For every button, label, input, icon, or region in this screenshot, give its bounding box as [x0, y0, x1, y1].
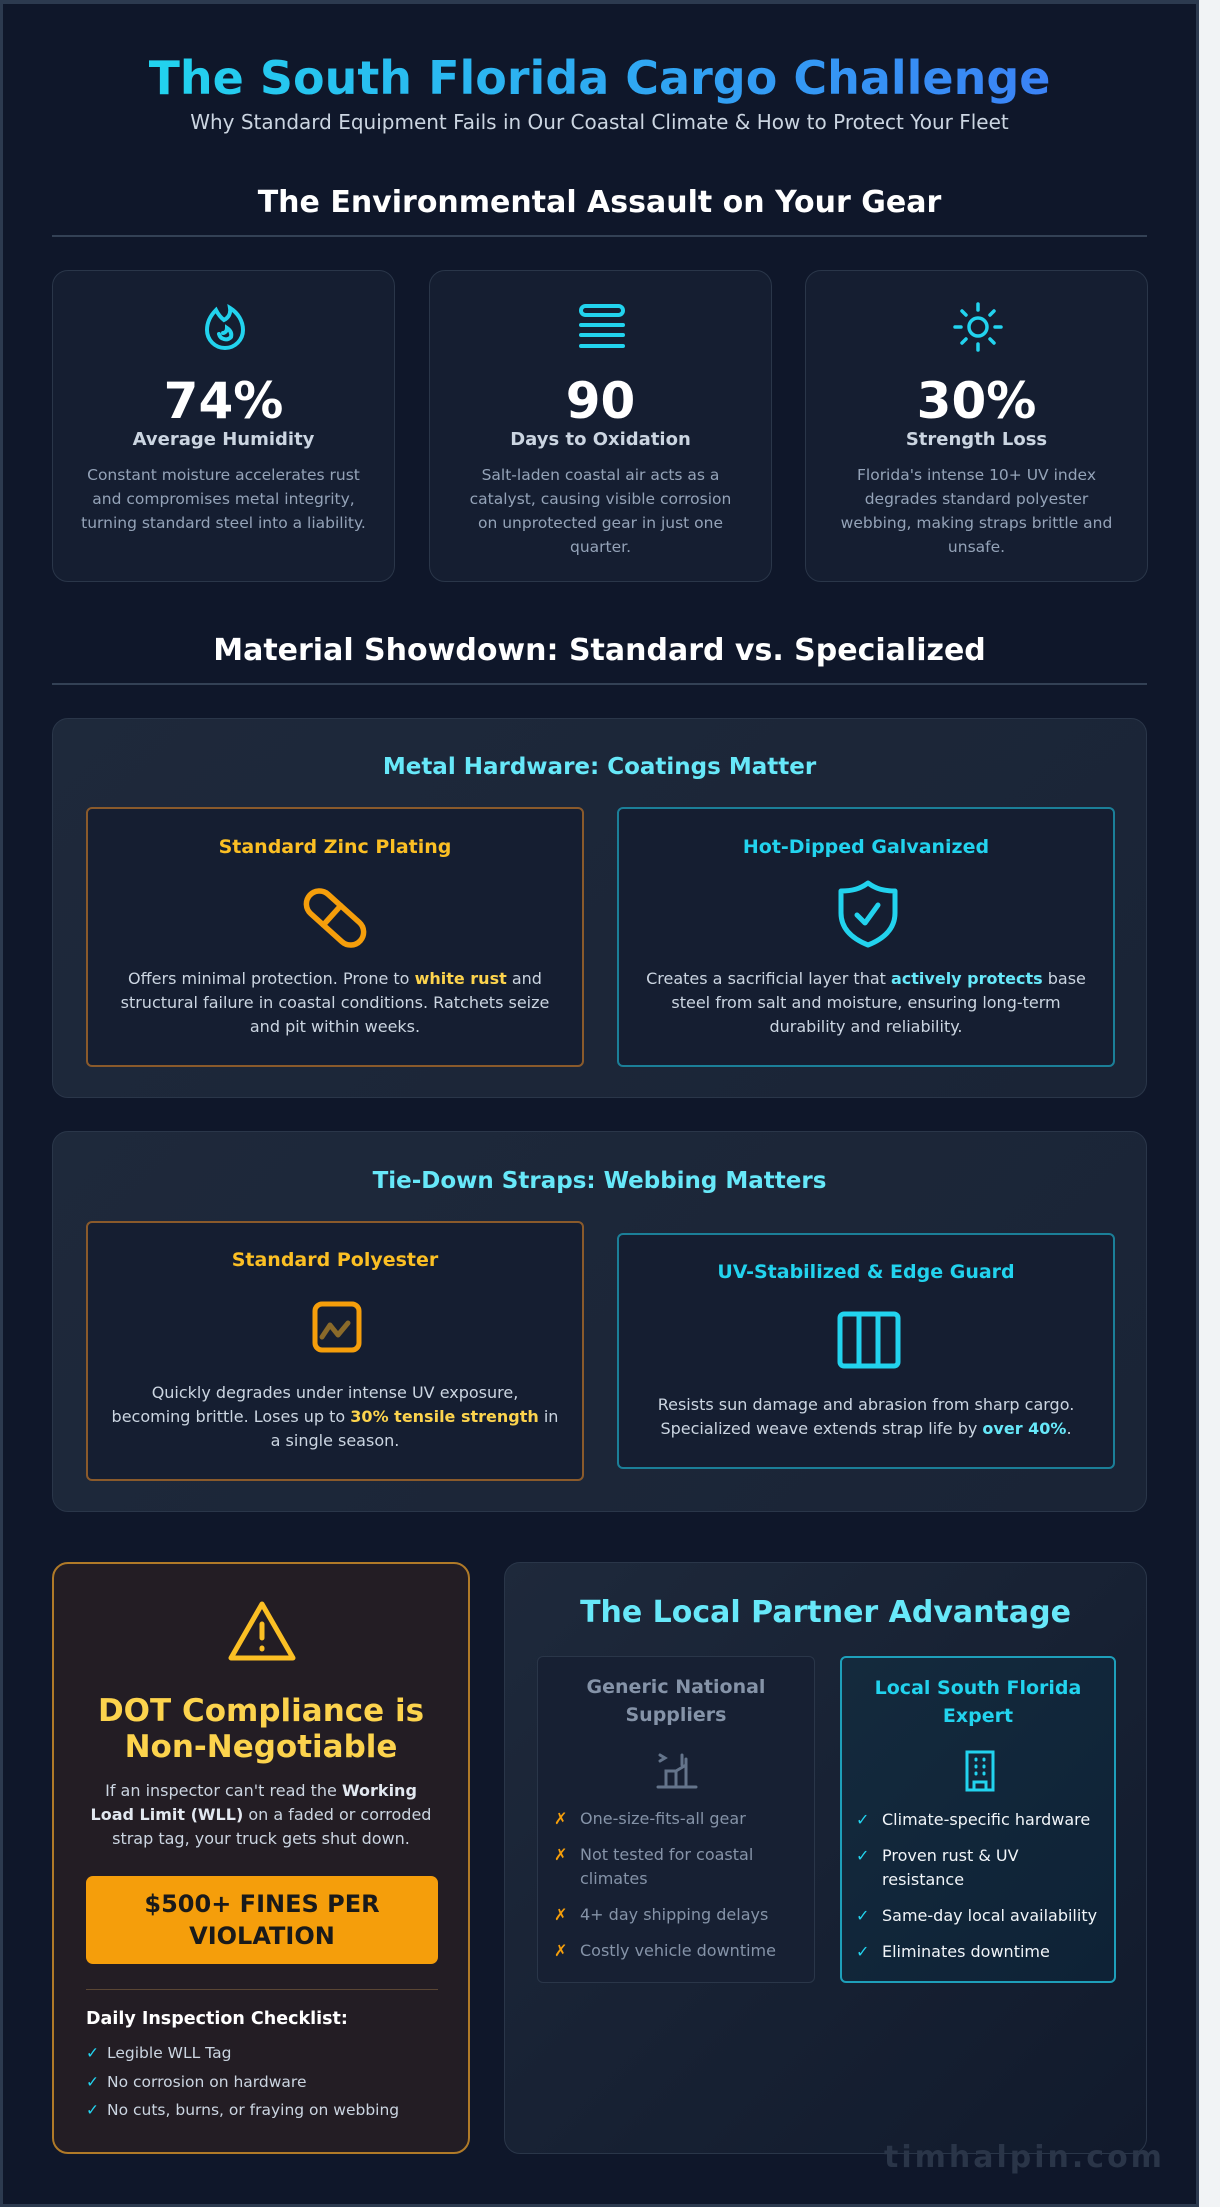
- subtitle: Why Standard Equipment Fails in Our Coastal Climate & How to Protect Your Fleet: [190, 110, 1009, 134]
- card: generic national: ✗: [554, 1905, 567, 1924]
- card: hot-dipped galvanized: [617, 807, 1115, 1067]
- stat card: humidity: Average Humidity: [133, 429, 314, 450]
- card: local expert: ✓: [856, 1906, 869, 1925]
- icon: factory: [656, 1753, 698, 1788]
- text: If an inspector can't read the Working Load Limit (WLL) on a faded or corroded strap tag, your truck gets shut down.: [91, 1781, 431, 1848]
- card: local expert: ✓: [856, 1846, 869, 1865]
- stat card: humidity: 74%: [164, 372, 283, 430]
- card: UV-stabilized: UV-Stabilized & Edge Guard: [717, 1261, 1015, 1283]
- card: local expert: ✓: [856, 1942, 869, 1961]
- card: generic national: Generic National: [587, 1676, 765, 1698]
- fine callout: $500+ FINES PER: [144, 1890, 380, 1918]
- watermark: timhalpin.com: [884, 2140, 1165, 2175]
- stat card: strength loss: Strength Loss: [906, 429, 1047, 450]
- card: zinc plating: [86, 807, 584, 1067]
- title: The South Florida Cargo Challenge: [148, 51, 1050, 105]
- panel: local partner advantage: [504, 1562, 1147, 2154]
- fine callout: VIOLATION: [189, 1922, 335, 1950]
- panel title: Tie-Down Straps: Webbing Matters: [373, 1168, 826, 1194]
- heading: DOT Compliance is: [98, 1693, 424, 1729]
- card: hot-dipped galvanized: Hot-Dipped Galvanized: [743, 836, 989, 858]
- heading: environmental assault: The Environmental Assault on Your Gear: [258, 185, 941, 220]
- heading: [98, 1693, 424, 1765]
- card: standard polyester: Standard Polyester: [232, 1249, 438, 1271]
- stat card: oxidation: [429, 270, 772, 582]
- checklist: ✓: [86, 2072, 99, 2090]
- checklist: No corrosion on hardware: [107, 2072, 306, 2090]
- card: generic national: Suppliers: [625, 1704, 726, 1726]
- card: standard polyester: a single season.: [271, 1431, 399, 1450]
- card: local expert: Expert: [943, 1705, 1013, 1727]
- icon: sun: [953, 302, 1003, 352]
- heading: material showdown: Material Showdown: Standard vs. Specialized: [213, 633, 986, 668]
- card: standard polyester: [86, 1221, 584, 1481]
- icon: pill: [304, 888, 366, 948]
- card: local expert: Same-day local availability: [882, 1906, 1097, 1925]
- card: local expert: Climate-specific hardware: [882, 1810, 1090, 1829]
- card: generic national: ✗: [554, 1845, 567, 1864]
- card: generic national: 4+ day shipping delays: [580, 1905, 768, 1924]
- card: generic national: One-size-fits-all gear: [580, 1809, 746, 1828]
- checklist: [86, 2009, 399, 2119]
- fine callout: [86, 1876, 438, 1964]
- card: local expert: Local South Florida: [875, 1677, 1081, 1699]
- stat card: oxidation: Salt-laden coastal air acts as a catalyst, causing visible corrosion on unprotected gear in just one quarter.: [470, 466, 731, 556]
- icon: columns: [838, 1312, 900, 1368]
- card: local expert: Proven rust & UV resistance: [882, 1846, 1019, 1889]
- card: standard polyester: Quickly degrades under intense UV exposure,: [152, 1383, 518, 1402]
- checklist: ✓: [86, 2044, 99, 2062]
- card: zinc plating: Standard Zinc Plating: [219, 836, 451, 858]
- card: UV-stabilized: Resists sun damage and abrasion from sharp cargo. Specialized weave extends strap life by over 40%.: [658, 1395, 1074, 1438]
- checklist: ✓: [86, 2101, 99, 2119]
- icon: shield check: [838, 880, 898, 948]
- stat card: oxidation: 90: [566, 372, 635, 430]
- card: generic national: ✗: [554, 1809, 567, 1828]
- heading: Non-Negotiable: [125, 1729, 397, 1765]
- icon: flame/drop: [205, 304, 245, 350]
- card: generic national: Not tested for coastal climates: [580, 1845, 753, 1888]
- card: local expert: [840, 1656, 1116, 1983]
- card: generic national: ✗: [554, 1941, 567, 1960]
- stat card: strength loss: 30%: [917, 372, 1036, 430]
- card: UV-stabilized: [617, 1233, 1115, 1469]
- card: generic national: Costly vehicle downtime: [580, 1941, 776, 1960]
- checklist: No cuts, burns, or fraying on webbing: [107, 2101, 399, 2119]
- card: local expert: Eliminates downtime: [882, 1942, 1050, 1961]
- panel: tie-down straps: [52, 1131, 1147, 1512]
- stat card: strength loss: Florida's intense 10+ UV index degrades standard polyester webbing, making straps brittle and unsafe.: [841, 466, 1112, 556]
- icon: layers: [579, 304, 625, 348]
- stat card: oxidation: Days to Oxidation: [510, 429, 691, 450]
- stat card: strength loss: [805, 270, 1148, 582]
- card: zinc plating: Offers minimal protection. Prone to white rust and structural failure in coastal conditions. Ratchets seize and pit within weeks.: [121, 969, 549, 1036]
- panel title: The Local Partner Advantage: [580, 1595, 1071, 1630]
- icon: square chart: [312, 1302, 362, 1352]
- icon: warning: [228, 1602, 296, 1660]
- panel: DOT compliance: [52, 1562, 470, 2154]
- card: generic national: [537, 1656, 815, 1983]
- stat card: humidity: Constant moisture accelerates rust and compromises metal integrity, turning standard steel into a liability.: [81, 466, 366, 532]
- checklist: Daily Inspection Checklist:: [86, 2009, 348, 2029]
- card: hot-dipped galvanized: Creates a sacrificial layer that actively protects base steel from salt and moisture, ensuring long-term durability and reliability.: [646, 969, 1086, 1036]
- card: standard polyester: becoming brittle. Loses up to 30% tensile strength in: [112, 1407, 558, 1426]
- icon: building: [966, 1750, 994, 1792]
- card: local expert: ✓: [856, 1810, 869, 1829]
- stat card: humidity: [52, 270, 395, 582]
- panel title: Metal Hardware: Coatings Matter: [383, 754, 816, 780]
- panel: metal hardware: [52, 718, 1147, 1098]
- checklist: Legible WLL Tag: [107, 2044, 231, 2062]
